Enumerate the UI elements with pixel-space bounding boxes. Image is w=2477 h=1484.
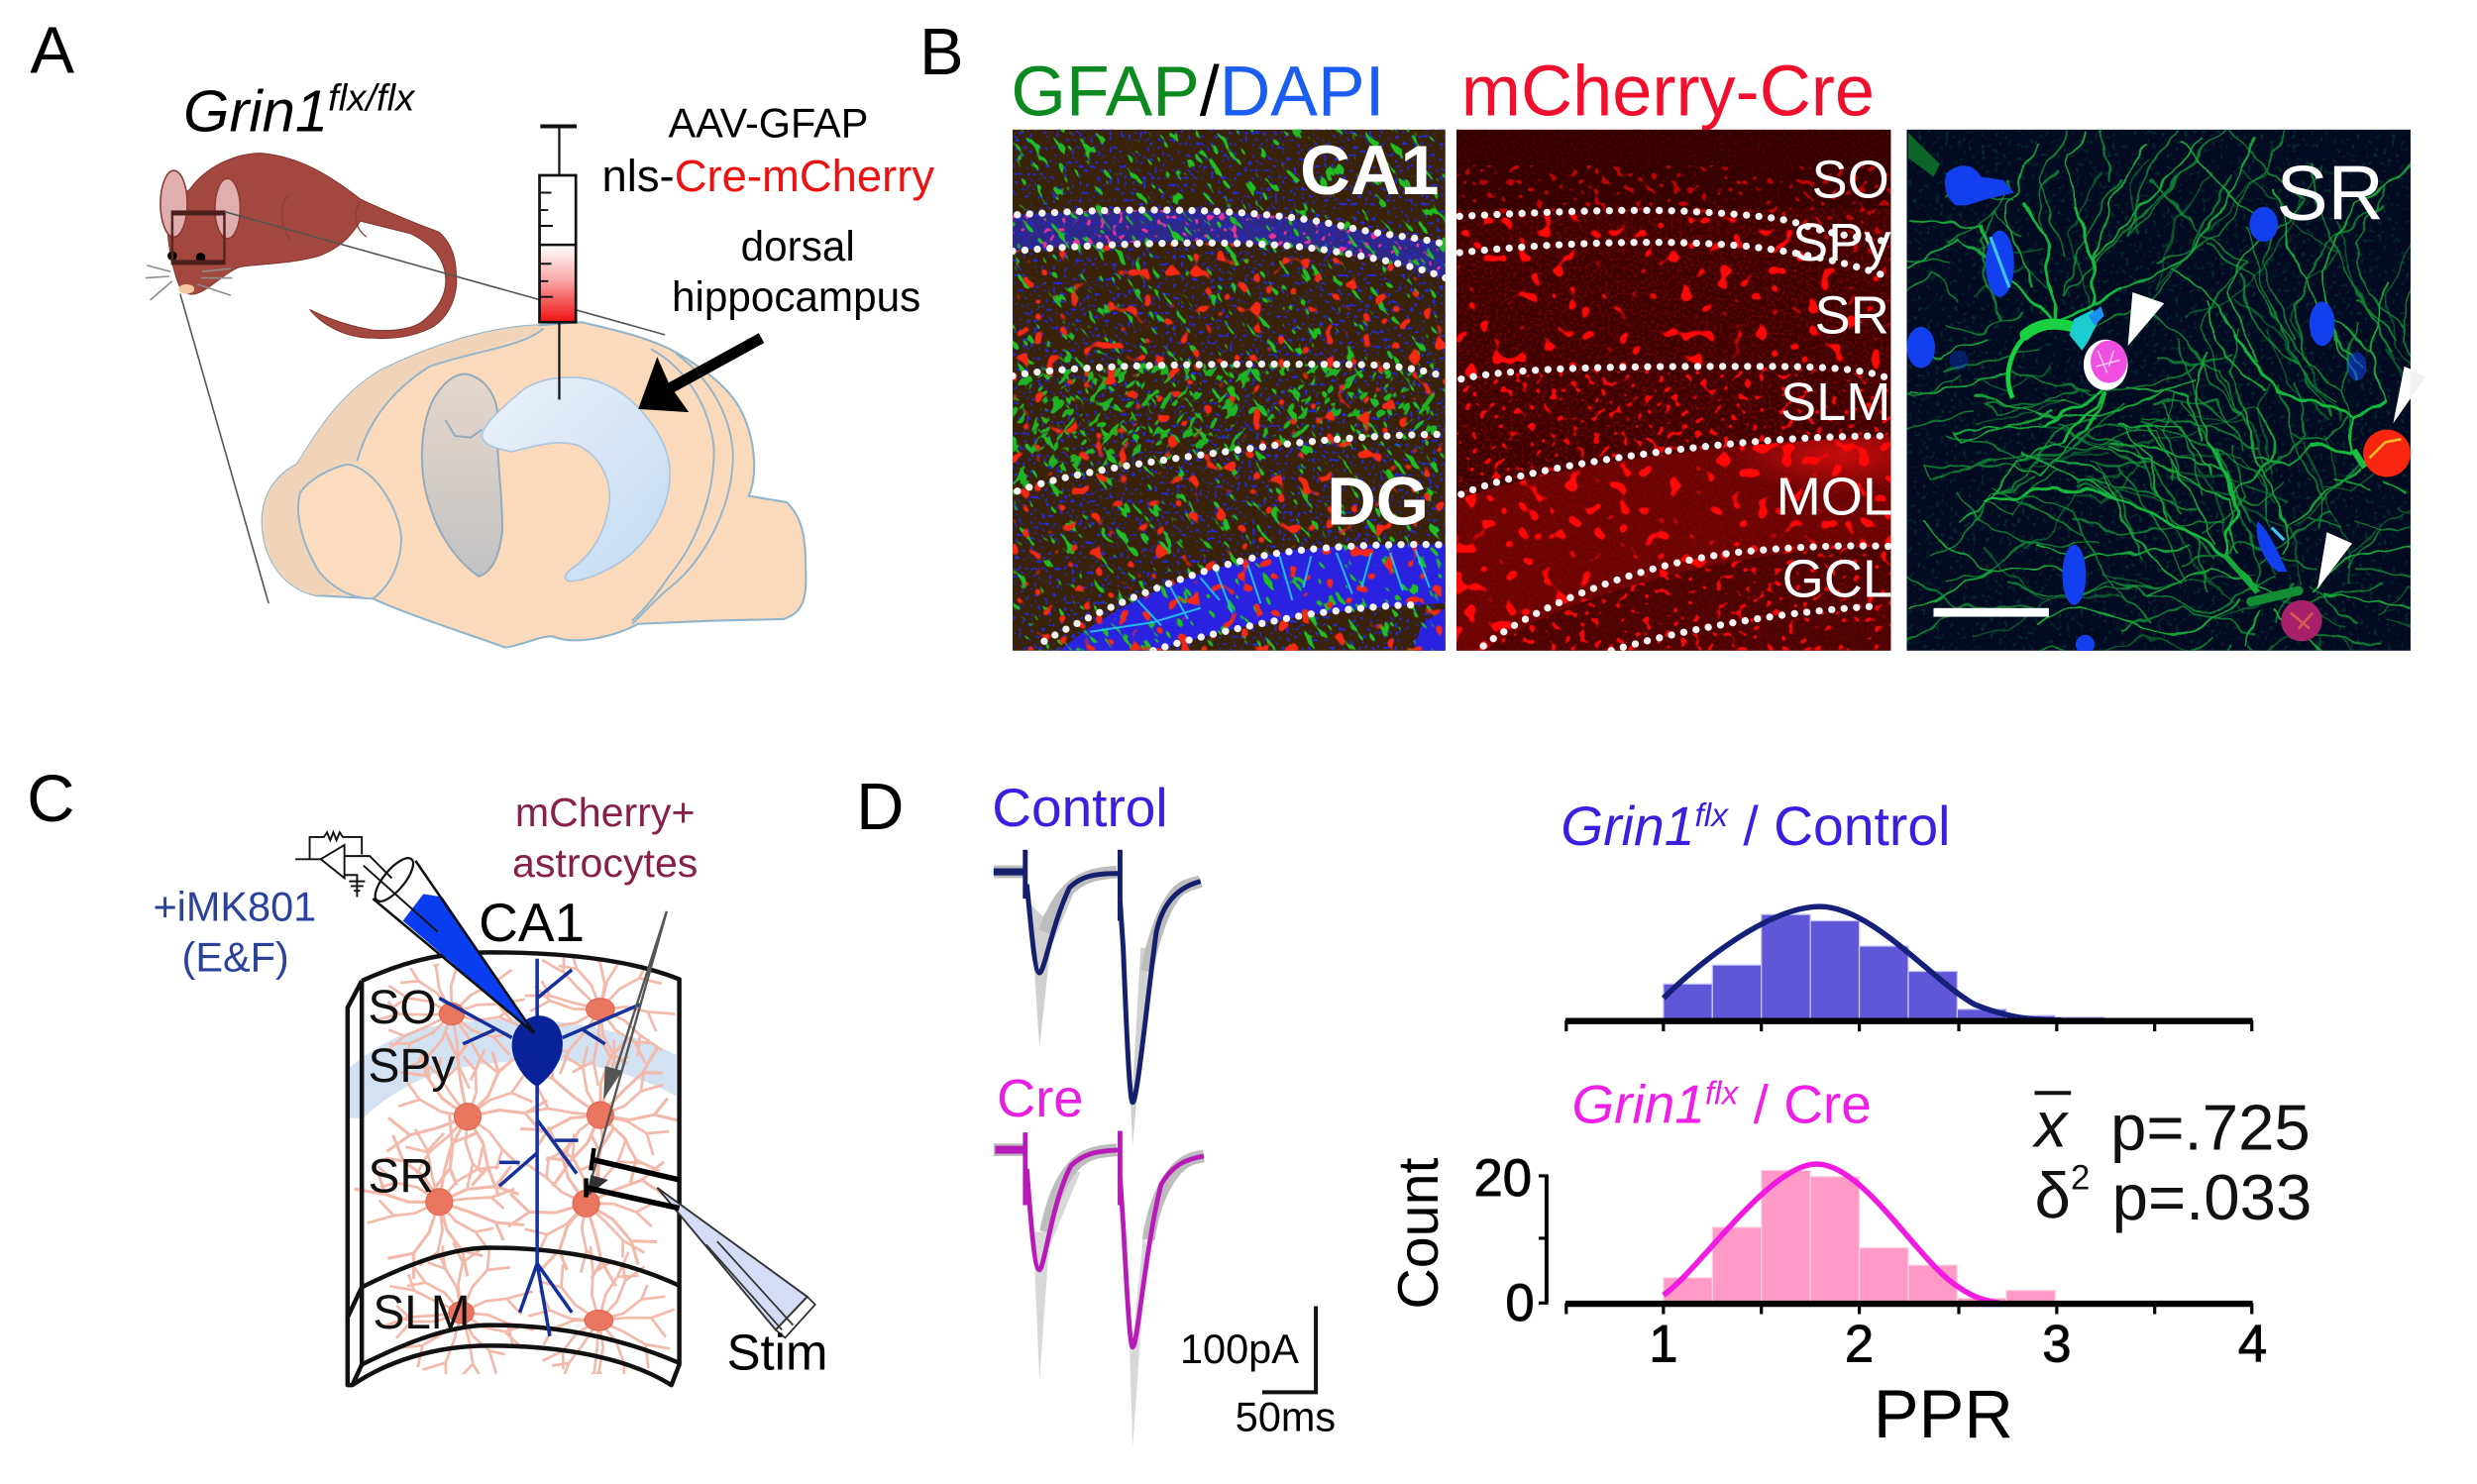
stats: p=.725 xyxy=(2110,1092,2311,1164)
image: astrocytes in SR xyxy=(1906,129,2425,651)
label: AAV construct: AAV-GFAP xyxy=(668,100,868,147)
heading: Grin1 flx/flx: Grin1 xyxy=(183,77,328,144)
label: DG: DG xyxy=(1327,463,1429,539)
stats: p=.033 xyxy=(2112,1161,2312,1233)
layer labels: MOL xyxy=(1777,468,1892,527)
icon: stimulating electrode xyxy=(587,1148,815,1337)
brain region: thalamus xyxy=(422,374,502,577)
panel letter D: D xyxy=(856,770,905,844)
layer labels: SPy xyxy=(369,1040,455,1093)
heading: Grin1 flx / Cre: flx xyxy=(1705,1075,1740,1112)
arrowhead 3 xyxy=(2317,532,2352,589)
label: Stim: Stim xyxy=(726,1324,827,1380)
layer labels: SO xyxy=(1812,150,1889,209)
image: GFAP/DAPI CA1 and DG xyxy=(1013,129,1446,651)
arrowhead 1 xyxy=(2128,292,2164,346)
heading: Grin1 flx / Cre: Grin1 xyxy=(1571,1074,1705,1135)
label: CA1: CA1 xyxy=(479,892,585,953)
scale label: 50ms: 50ms xyxy=(1236,1393,1336,1439)
cell: cyan overlap xyxy=(2070,309,2098,351)
label: mCherry+ astrocytes: mCherry+ xyxy=(515,790,696,835)
heading: Grin1 flx/flx: flx/flx xyxy=(328,77,416,120)
cell: mCherry nucleus red xyxy=(2363,430,2411,477)
pyramidal blue band xyxy=(1013,210,1446,278)
icon: brain xyxy=(263,322,806,648)
slice outline xyxy=(348,952,680,1385)
arrow: to astrocytes xyxy=(587,911,667,1197)
label: iMK801: (E&F) xyxy=(182,933,289,980)
panel: D paired-pulse data xyxy=(856,770,2312,1452)
heading: Grin1 flx / Control: / Control xyxy=(1728,795,1950,857)
chart: control traces xyxy=(994,850,1201,1145)
label: dorsal hippocampus: hippocampus xyxy=(672,273,920,320)
y tick labels xyxy=(1474,1149,1535,1332)
panel: B microscopy xyxy=(925,29,2425,651)
astrocytes xyxy=(355,957,678,1374)
image: mCherry-Cre layers xyxy=(1456,129,1890,651)
heading: Grin1 flx / Control: Grin1 xyxy=(1561,795,1695,857)
zoom guide lines xyxy=(180,212,665,603)
label: AAV construct: nls- xyxy=(601,151,675,201)
label: Cre: Cre xyxy=(997,1069,1083,1128)
panel letter A: A xyxy=(30,13,74,87)
layer labels: GCL xyxy=(1782,550,1892,609)
dotted layer boundaries xyxy=(1459,210,1890,651)
diagram: hippocampal slice xyxy=(295,832,699,1411)
y tick labels: 20 xyxy=(1474,1149,1532,1208)
stats: x xyxy=(2032,1088,2070,1160)
x tick labels xyxy=(1649,1315,2267,1373)
layer labels: SO xyxy=(369,982,437,1034)
layer labels xyxy=(369,982,471,1339)
icon: syringe xyxy=(539,127,577,399)
astrocyte soma process xyxy=(2005,338,2025,399)
axis title: PPR: PPR xyxy=(1874,1376,2013,1452)
chart: control histogram xyxy=(1565,906,2253,1031)
cells: blue DAPI nuclei xyxy=(1906,165,2366,654)
chart: cre traces xyxy=(994,1131,1204,1446)
panel letter C: C xyxy=(27,762,75,836)
heading: Grin1 flx / Control: flx xyxy=(1695,797,1729,834)
label: iMK801: +iMK801 xyxy=(153,883,316,929)
label: Control: Control xyxy=(992,777,1168,838)
scale bar xyxy=(1262,1306,1316,1392)
cell: mCherry nucleus dim xyxy=(2281,600,2322,641)
green processes xyxy=(1906,129,2411,651)
chart: cre histogram xyxy=(1474,1149,2267,1373)
x tick labels: 4 xyxy=(2238,1315,2267,1373)
dentate blue band xyxy=(1060,545,1446,651)
heading: mCherry-Cre: mCherry-Cre xyxy=(1461,52,1875,131)
scale bar xyxy=(1933,608,2049,617)
label: AAV construct: Cre-mCherry xyxy=(675,151,934,201)
amplifier circuit xyxy=(295,832,391,898)
stats xyxy=(2032,1088,2312,1233)
y tick labels: 0 xyxy=(1505,1274,1535,1332)
axis title: Count: Count xyxy=(1387,1158,1451,1310)
x tick labels: 2 xyxy=(1845,1315,1874,1373)
icon: mouse xyxy=(146,154,457,339)
pyramidal band xyxy=(348,1019,676,1118)
panel: C recording schematic xyxy=(27,762,827,1411)
arrowhead 2 overhang xyxy=(2411,371,2426,398)
arrowhead 2 xyxy=(2393,367,2411,424)
label: SR: SR xyxy=(2276,150,2384,237)
heading: Grin1 flx / Cre: / Cre xyxy=(1738,1074,1872,1135)
x tick labels: 1 xyxy=(1649,1315,1677,1373)
x tick labels: 3 xyxy=(2042,1315,2071,1373)
panel: A surgery schematic xyxy=(30,13,934,648)
heading: GFAP/DAPI: GFAP/DAPI xyxy=(1011,52,1384,131)
dentate cyan streaks xyxy=(1090,550,1430,632)
layer labels: SPy xyxy=(1792,213,1890,272)
brain region: dorsal hippocampus xyxy=(482,377,670,582)
label: CA1: CA1 xyxy=(1300,132,1439,209)
label: mCherry+ astrocytes: astrocytes xyxy=(512,840,698,886)
layer labels: SR xyxy=(369,1151,434,1204)
stray dotted boundary tail xyxy=(1908,274,1914,281)
stats: 2 xyxy=(2071,1159,2090,1198)
layer labels: SLM xyxy=(1780,372,1890,432)
stats: δ xyxy=(2035,1159,2071,1231)
dotted layer boundaries xyxy=(1013,210,1446,651)
layer labels: SLM xyxy=(373,1287,471,1339)
recording pipette xyxy=(364,853,534,1033)
scale label: 100pA: 100pA xyxy=(1180,1325,1299,1372)
label: dorsal hippocampus: dorsal xyxy=(741,223,855,269)
layer labels: SR xyxy=(1815,285,1889,345)
cell: mCherry nucleus pink xyxy=(2084,340,2128,390)
panel letter B: B xyxy=(919,15,964,89)
neuron xyxy=(439,959,640,1336)
layer labels xyxy=(1777,150,1892,609)
arrow: to hippocampus xyxy=(638,338,762,412)
